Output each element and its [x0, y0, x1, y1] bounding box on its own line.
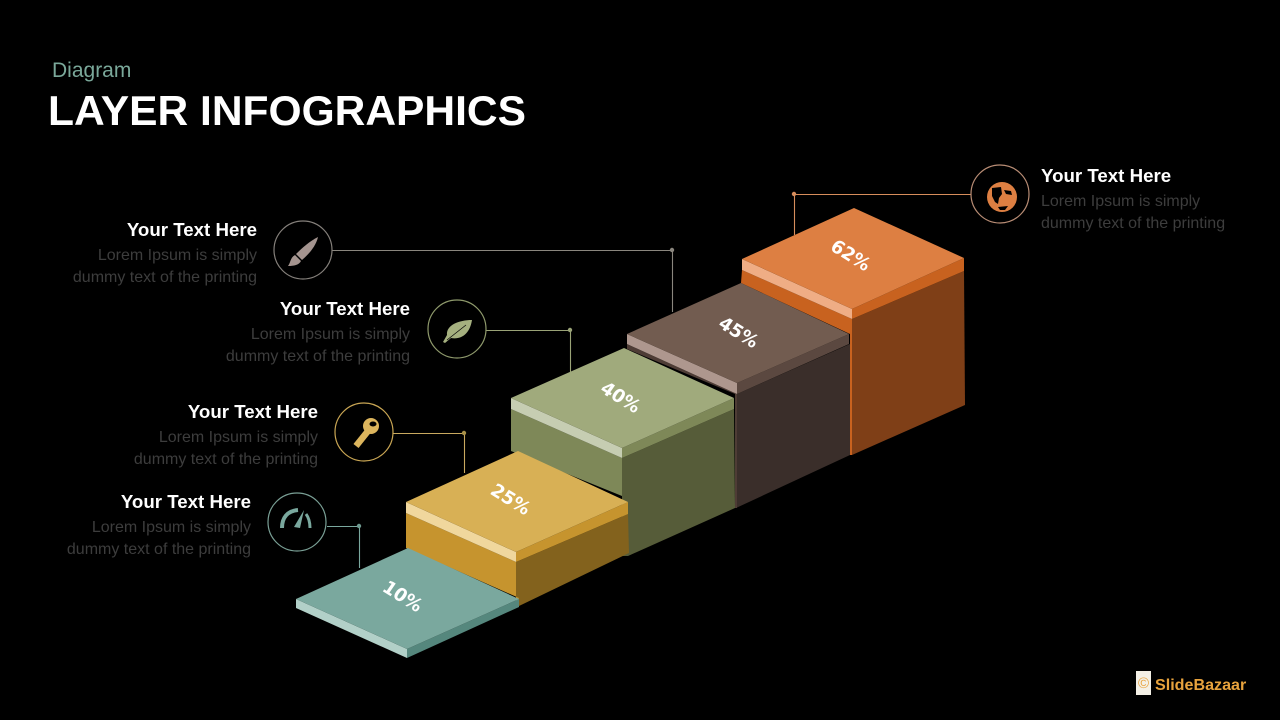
text block: brush: Your Text Here [127, 219, 257, 240]
layer 40% green: 40% [596, 378, 645, 418]
text block: key: Lorem Ipsum is simply [159, 429, 318, 446]
text block: globe: dummy text of the printing [1041, 215, 1225, 232]
connector: globe [792, 192, 971, 235]
connector: brush [332, 248, 674, 312]
icon: key [335, 403, 393, 461]
text block: leaf: Your Text Here [280, 298, 410, 319]
text block: globe [1041, 165, 1225, 232]
icon: gauge [268, 493, 326, 551]
subtitle: Diagram [52, 59, 131, 82]
logo: SlideBazaar [1155, 676, 1247, 694]
text block: leaf: Lorem Ipsum is simply [251, 326, 410, 343]
logo [1136, 671, 1247, 695]
icon: globe [971, 165, 1029, 223]
text block: leaf: dummy text of the printing [226, 348, 410, 365]
text block: gauge [67, 491, 251, 558]
connector: gauge [327, 524, 361, 568]
text block: gauge: dummy text of the printing [67, 541, 251, 558]
connector: leaf [486, 328, 572, 372]
text block: leaf [226, 298, 410, 365]
text block: globe: Lorem Ipsum is simply [1041, 193, 1200, 210]
title: LAYER INFOGRAPHICS [48, 87, 526, 134]
text block: brush: dummy text of the printing [73, 269, 257, 286]
text block: brush: Lorem Ipsum is simply [98, 247, 257, 264]
text block: gauge: Lorem Ipsum is simply [92, 519, 251, 536]
logo: © [1138, 675, 1149, 692]
layer 62% orange [741, 208, 965, 455]
layer 25% yellow [406, 451, 629, 606]
icon: brush [274, 221, 332, 279]
text block: gauge: Your Text Here [121, 491, 251, 512]
layer 10% teal [296, 548, 519, 658]
text block: globe: Your Text Here [1041, 165, 1171, 186]
text block: brush [73, 219, 257, 286]
text block: key: dummy text of the printing [134, 451, 318, 468]
text block: key [134, 401, 318, 468]
layer 25% yellow: 25% [486, 480, 535, 520]
layer 10% teal: 10% [378, 577, 427, 617]
layer 40% green [511, 348, 735, 556]
layer 62% orange: 62% [826, 236, 875, 276]
layer 45% brown [627, 283, 850, 508]
icon: leaf [428, 300, 486, 358]
text block: key: Your Text Here [188, 401, 318, 422]
connector: key [393, 431, 466, 473]
layer 45% brown: 45% [714, 313, 763, 353]
